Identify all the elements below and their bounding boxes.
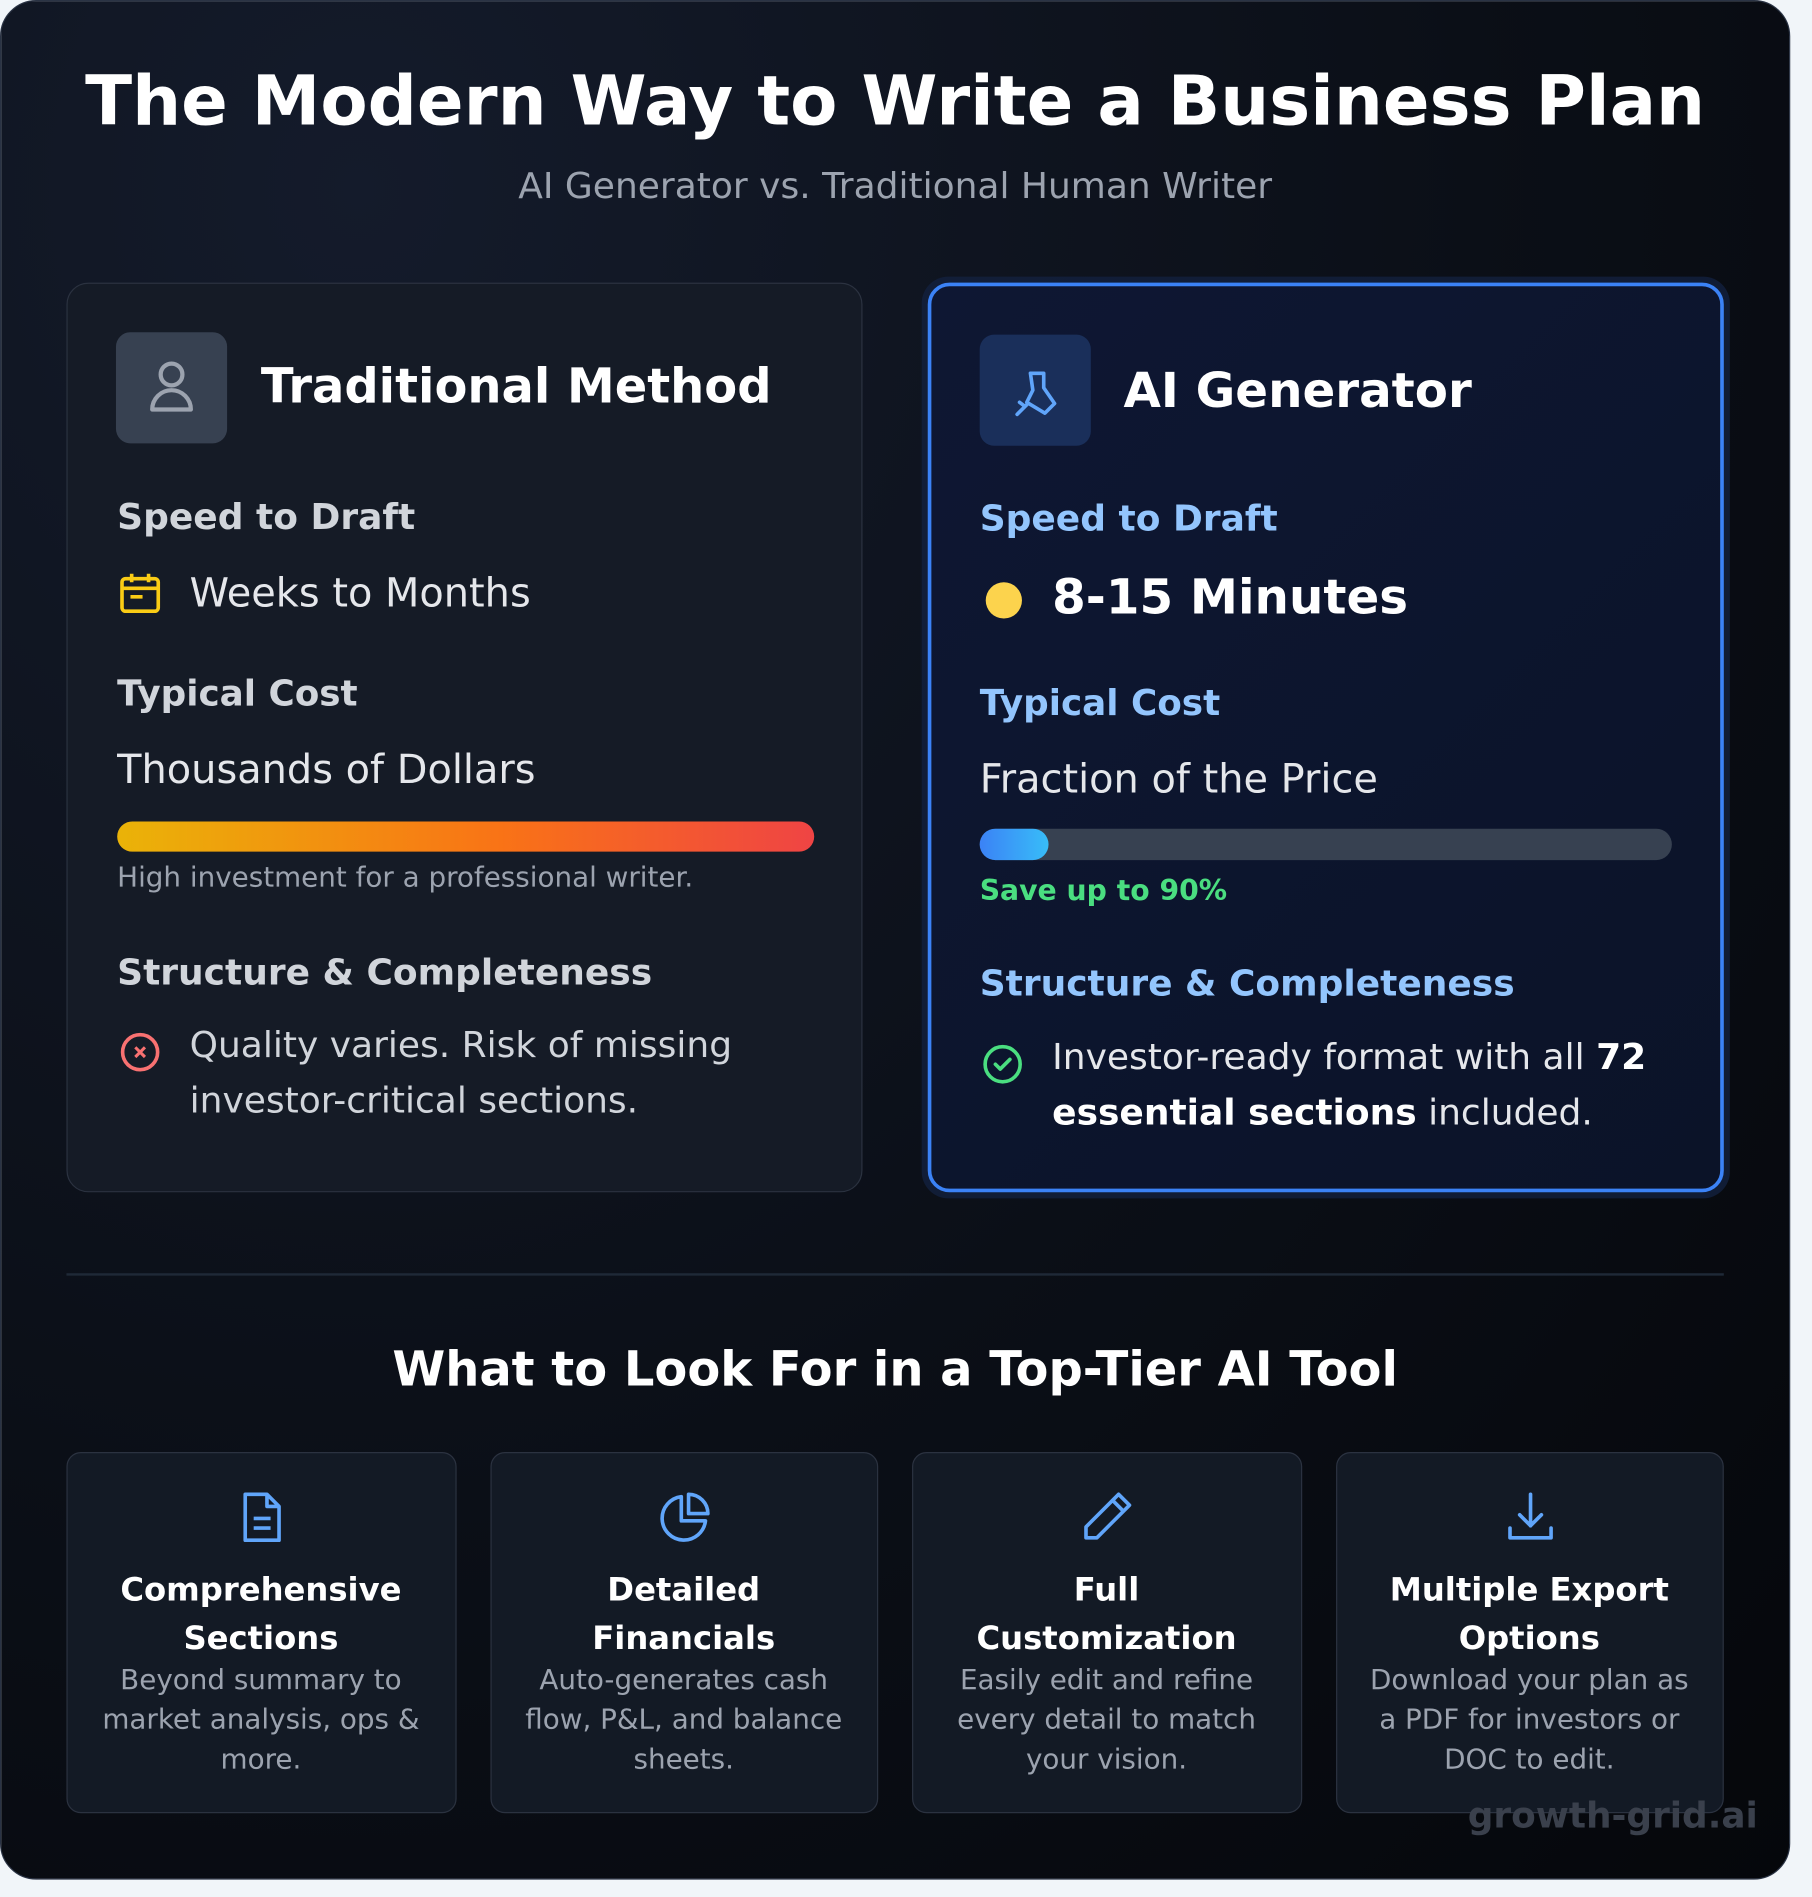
- description: [102, 1665, 420, 1776]
- title: Customization: [976, 1620, 1237, 1657]
- description: [1370, 1665, 1689, 1776]
- watermark: growth-grid.ai: [1468, 1795, 1758, 1837]
- description: sheets.: [633, 1744, 734, 1776]
- cost value: Thousands of Dollars: [117, 745, 536, 792]
- title: [592, 1572, 775, 1657]
- label speed: Speed to Draft: [980, 498, 1278, 540]
- structure text: [1052, 1036, 1646, 1134]
- label cost: Typical Cost: [117, 673, 358, 714]
- heading: Traditional Method: [261, 359, 772, 414]
- feature card: financials: [490, 1452, 878, 1813]
- label structure: Structure & Completeness: [980, 963, 1515, 1005]
- icon: flask: [980, 335, 1091, 446]
- speed value: Weeks to Months: [190, 569, 531, 616]
- description: your vision.: [1026, 1744, 1187, 1776]
- title: Detailed: [607, 1572, 760, 1609]
- cost bar: [980, 829, 1672, 860]
- description: Beyond summary to: [120, 1665, 402, 1696]
- title: Full: [1074, 1572, 1139, 1609]
- panel: traditional: [66, 283, 863, 1192]
- description: every detail to match: [957, 1704, 1256, 1736]
- icon: download: [1508, 1492, 1553, 1540]
- title: [976, 1572, 1237, 1657]
- savings note: Save up to 90%: [980, 873, 1227, 907]
- title: Financials: [592, 1620, 775, 1657]
- label structure: Structure & Completeness: [117, 952, 652, 994]
- label cost: Typical Cost: [980, 683, 1220, 724]
- cost value: Fraction of the Price: [980, 755, 1378, 802]
- heading: AI Generator: [1123, 364, 1472, 419]
- icon: pencil: [1084, 1492, 1132, 1540]
- structure text: Investor-ready format with all 72: [1052, 1036, 1646, 1079]
- description: market analysis, ops &: [102, 1704, 420, 1736]
- description: DOC to edit.: [1444, 1744, 1615, 1776]
- icon: calendar: [120, 574, 160, 613]
- description: Auto-generates cash: [539, 1665, 828, 1696]
- icon: x circle: [120, 1032, 160, 1072]
- description: a PDF for investors or: [1379, 1704, 1679, 1736]
- feature card: customization: [912, 1452, 1302, 1813]
- speed value: 8-15 Minutes: [1052, 570, 1408, 626]
- description: flow, P&L, and balance: [525, 1704, 842, 1736]
- description: Easily edit and refine: [960, 1665, 1253, 1696]
- cost note: High investment for a professional writer.: [117, 863, 693, 894]
- feature card: export: [1336, 1452, 1724, 1813]
- title: Multiple Export: [1390, 1572, 1669, 1609]
- structure text: [190, 1024, 732, 1122]
- icon: document: [243, 1492, 281, 1542]
- description: more.: [221, 1744, 301, 1776]
- title: [1390, 1572, 1669, 1657]
- cost bar: [117, 821, 814, 852]
- label speed: Speed to Draft: [117, 496, 415, 539]
- panel: AI generator: [922, 277, 1730, 1198]
- icon: pie chart: [660, 1492, 710, 1542]
- title: [120, 1572, 401, 1657]
- feature card: sections: [66, 1452, 457, 1813]
- description: [957, 1665, 1256, 1776]
- section heading: What to Look For in a Top-Tier AI Tool: [392, 1342, 1398, 1398]
- description: Download your plan as: [1370, 1665, 1689, 1696]
- title: The Modern Way to Write a Business Plan: [85, 62, 1705, 141]
- title: Options: [1459, 1620, 1600, 1657]
- title: Comprehensive: [120, 1572, 401, 1609]
- subtitle: AI Generator vs. Traditional Human Writer: [518, 165, 1272, 208]
- icon: yellow dot: [986, 582, 1022, 618]
- structure text: Quality varies. Risk of missing: [190, 1024, 732, 1067]
- icon: person: [116, 332, 227, 443]
- structure text: investor-critical sections.: [190, 1080, 638, 1122]
- icon: check circle: [983, 1044, 1022, 1084]
- structure text: essential sections included.: [1052, 1092, 1593, 1134]
- description: [525, 1665, 842, 1776]
- title: Sections: [183, 1620, 338, 1657]
